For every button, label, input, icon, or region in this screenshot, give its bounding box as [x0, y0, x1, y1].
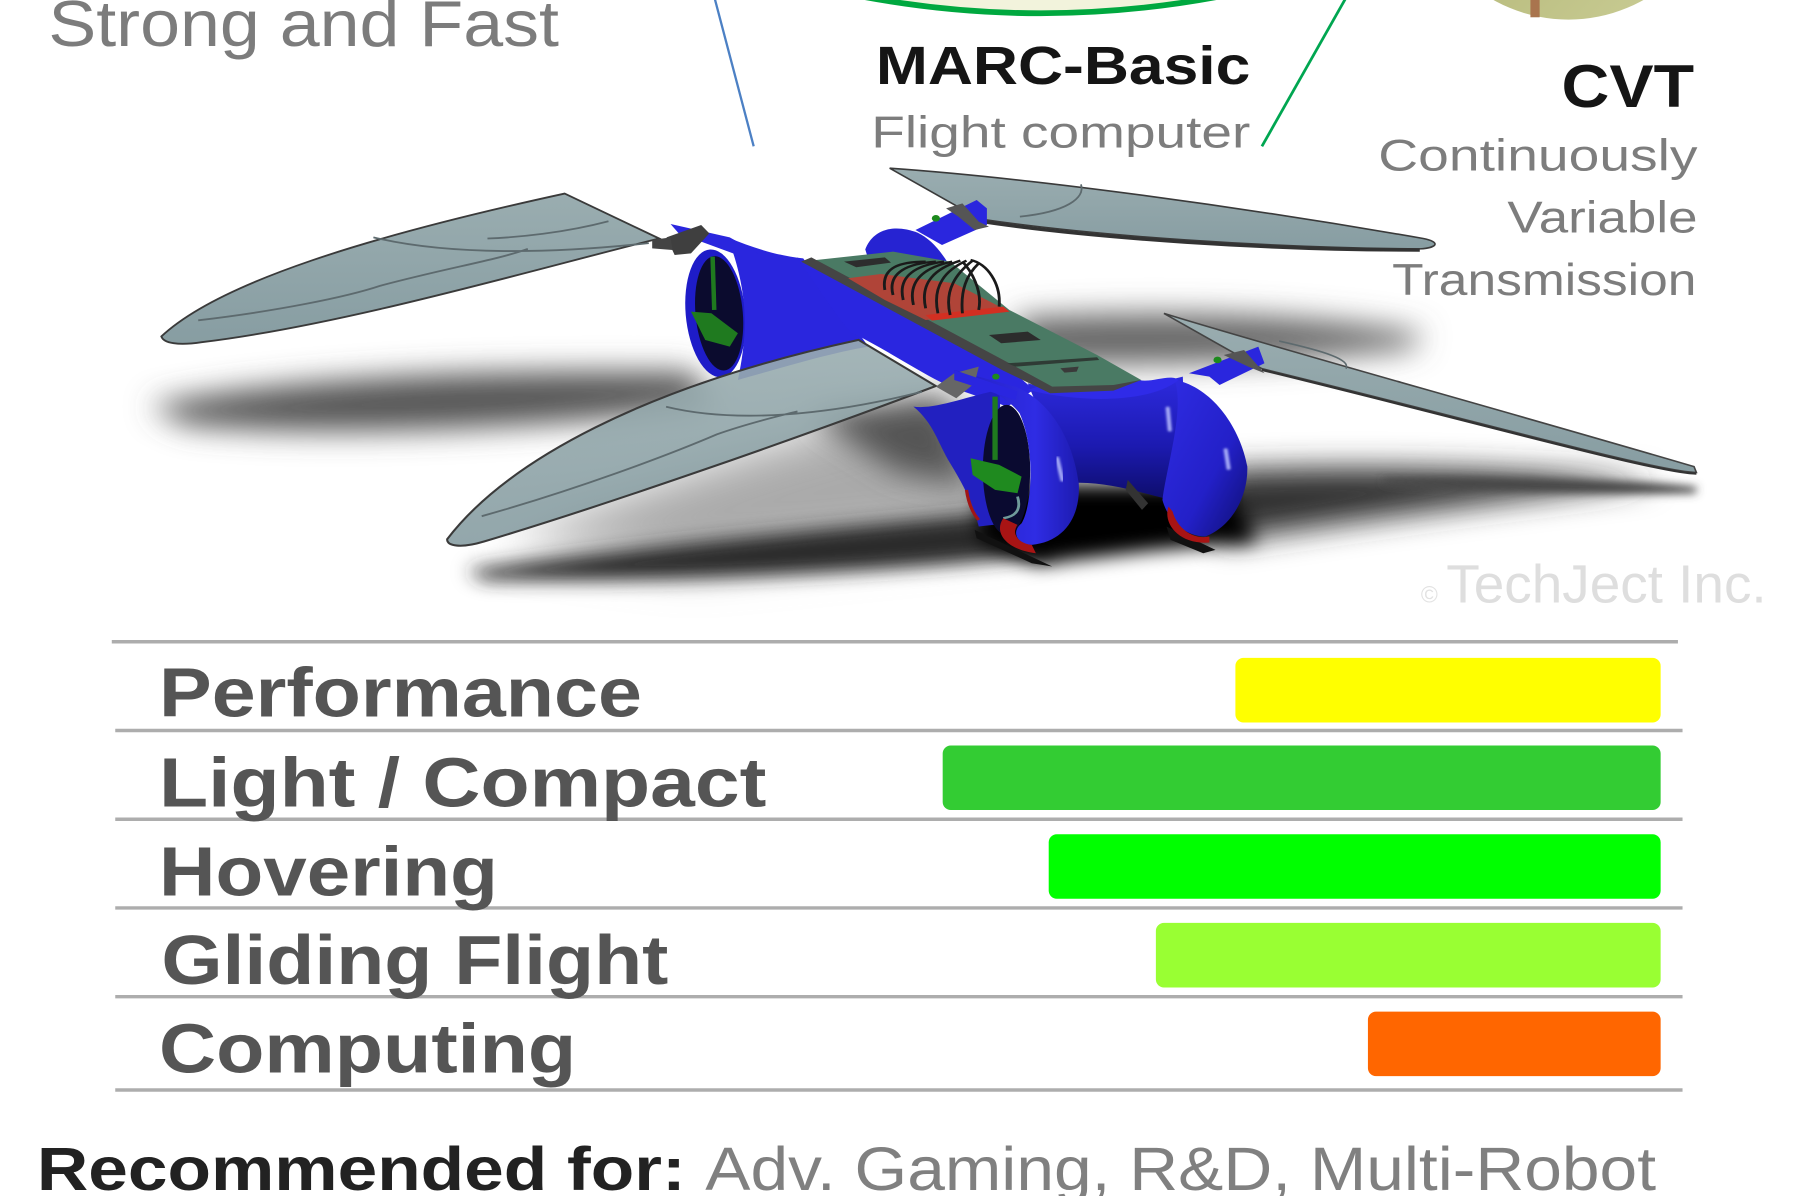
row: Light / Compact: Light / Compact — [159, 744, 766, 822]
label: CVT: CVT — [1562, 53, 1694, 120]
left arm — [652, 224, 758, 257]
ribbon wires — [884, 260, 999, 315]
drone rear section — [652, 200, 989, 380]
circuit boards — [801, 252, 1141, 393]
panel: capability ratings — [112, 642, 1683, 1090]
back bump — [865, 228, 948, 263]
wheels — [1000, 507, 1209, 553]
label: MARC-Basic — [871, 36, 1250, 157]
row: Computing — [159, 1010, 1661, 1088]
row: Performance — [159, 654, 1661, 732]
label: MARC-Basic: MARC-Basic — [876, 36, 1250, 96]
skids — [966, 480, 1215, 567]
front ring — [954, 370, 1079, 545]
rear pod — [680, 248, 751, 379]
row: Computing: Computing — [159, 1010, 576, 1088]
label: CVT — [1378, 53, 1698, 305]
recommended for — [37, 1135, 1656, 1196]
row: Hovering — [159, 832, 1661, 910]
drone front section — [797, 252, 1264, 567]
right ring — [1162, 380, 1247, 537]
label: MARC-Basic: Flight computer — [871, 106, 1250, 157]
back arm — [915, 200, 989, 245]
icon: MARC-Basic circle crop — [862, 0, 1219, 13]
wing: front left — [447, 340, 936, 546]
callout arrow: blue leader — [715, 0, 754, 146]
drone ground shadows — [150, 313, 1698, 580]
right arm — [1189, 347, 1264, 385]
deck underside — [1028, 378, 1179, 399]
wing: front right — [1164, 313, 1696, 474]
front hinge — [936, 367, 1018, 400]
ring highlight — [1057, 458, 1062, 480]
label: CVT: Transmission — [1392, 254, 1696, 305]
watermark: © — [1421, 582, 1438, 608]
row: Hovering: Hovering — [159, 832, 498, 910]
center cylinder — [1028, 377, 1187, 503]
under front — [913, 390, 1007, 527]
front disc — [971, 397, 1030, 535]
row: Gliding Flight: Gliding Flight — [161, 921, 668, 999]
icon: CVT circle crop — [1415, 0, 1722, 20]
watermark: TechJect Inc. — [1446, 555, 1767, 615]
body cone — [728, 237, 869, 380]
divider rows — [112, 642, 1683, 1090]
spine — [797, 257, 1034, 407]
label: CVT: Continuously — [1378, 130, 1698, 181]
callout arrow: green leader — [1262, 0, 1346, 146]
label: CVT: Variable — [1507, 192, 1698, 243]
wing: back right — [890, 168, 1435, 250]
row: Gliding Flight — [161, 921, 1661, 999]
right ring highlights — [1168, 408, 1229, 468]
row: Light / Compact — [159, 744, 1661, 822]
row: Performance: Performance — [159, 654, 642, 732]
wing: back left — [161, 194, 659, 344]
